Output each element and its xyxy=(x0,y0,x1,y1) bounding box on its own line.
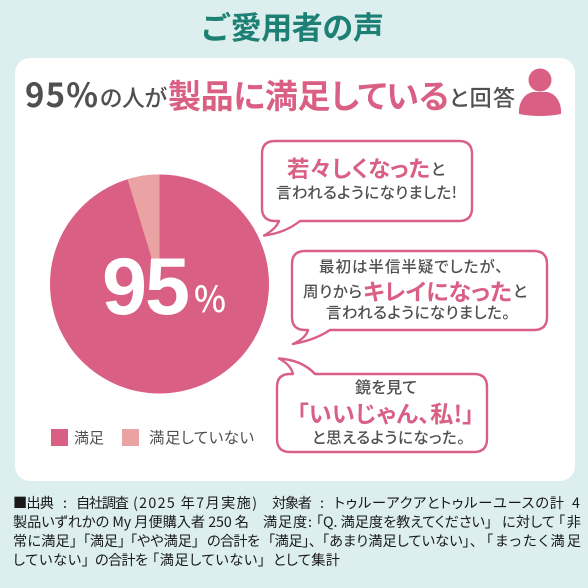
speech bubble 1 xyxy=(262,141,472,236)
legend xyxy=(51,426,254,448)
speech bubble 3: と思えるようになった。 xyxy=(312,426,465,448)
footnote: 自社調査 xyxy=(76,493,129,513)
footnote: 満足度: xyxy=(263,512,312,532)
footnote: 常に満足」 xyxy=(13,531,77,551)
icon: person xyxy=(519,68,561,116)
footnote: 「満足」、 xyxy=(268,531,316,551)
footnote: 「満足していない」 xyxy=(152,550,265,570)
footnote: 対象者 xyxy=(272,493,312,513)
heading xyxy=(25,69,515,118)
footnote: として集計 xyxy=(273,550,340,570)
footnote: 「あまり満足していない」、 xyxy=(322,531,477,551)
footnote xyxy=(13,493,581,570)
footnote: : xyxy=(63,493,67,513)
speech bubble 2: キレイになった xyxy=(363,273,512,307)
footnote: していない」 xyxy=(13,550,89,570)
pie value label: 95 xyxy=(102,242,190,332)
footnote: の合計を xyxy=(95,550,148,570)
speech bubble 3 xyxy=(277,358,487,452)
footnote: 4 xyxy=(572,493,580,513)
speech bubble 1: と xyxy=(431,156,445,180)
footnote: : xyxy=(320,493,324,513)
footnote: 「まったく満足 xyxy=(486,531,581,551)
speech bubble 1: 言われるようになりました! xyxy=(276,181,457,203)
footnote: 「非 xyxy=(558,512,581,532)
heading: 製品に満足している xyxy=(168,70,449,118)
speech bubble 2 xyxy=(292,251,547,344)
footnote: (2025 年7月実施) xyxy=(133,493,257,513)
speech bubble 3: 鏡を見て xyxy=(355,374,417,398)
panel: main white card xyxy=(15,58,575,481)
speech bubble 2: 周りから xyxy=(303,280,362,302)
speech bubble 3: 「いいじゃん、私!」 xyxy=(297,395,474,429)
title: ご愛用者の声 xyxy=(200,3,384,48)
footnote: 「満足」 xyxy=(83,531,125,551)
heading: 95% xyxy=(25,69,98,117)
pie chart xyxy=(50,174,269,394)
speech bubble 2: 言われるようになりました。 xyxy=(326,301,510,323)
footnote: ■出典 xyxy=(13,493,54,513)
footnote: に対して xyxy=(502,512,555,532)
footnote: 製品いずれかの My 月便購入者 250 名 xyxy=(13,512,249,532)
footnote: 「Q. 満足度を教えてください」 xyxy=(316,512,492,532)
legend: 満足 xyxy=(74,427,104,448)
speech bubble 2: 最初は半信半疑でしたが、 xyxy=(319,255,503,277)
footnote: 「やや満足」 xyxy=(130,531,199,551)
speech bubble 1: 若々しくなった xyxy=(287,152,430,184)
heading: と回答 xyxy=(449,81,515,113)
heading: の人が xyxy=(100,79,167,113)
legend: 満足していない xyxy=(149,426,254,448)
speech bubble 2: と xyxy=(513,278,527,302)
pie value label: % xyxy=(194,271,226,323)
footnote: の合計を xyxy=(207,531,260,551)
footnote: トゥルーアクアとトゥルーユースの計 xyxy=(334,493,564,513)
